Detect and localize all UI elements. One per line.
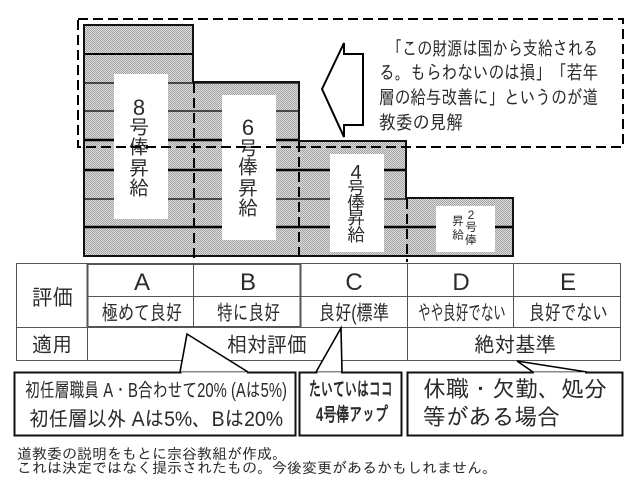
label: 8号俸昇給: 昇 [129, 158, 149, 180]
label: 2号俸昇給: 給 [452, 228, 464, 242]
text block: Hokkaido board view: 層の給与改善に」というのが道 [379, 87, 598, 109]
table row: 評価: 良好(標準 [319, 302, 389, 325]
staircase chart: salary step blocks [84, 25, 513, 262]
label: 2号俸昇給: 俸 [465, 233, 477, 247]
label: 2号俸昇給 [436, 206, 495, 252]
label: 6号俸昇給: 俸 [238, 157, 258, 179]
table row: 評価: 評価 [32, 285, 73, 310]
label: 6号俸昇給: 昇 [238, 178, 258, 200]
table row: 評価 [32, 269, 608, 325]
arrow pointing left [322, 43, 363, 137]
label: 2号俸昇給: 号 [465, 220, 477, 234]
label: 6号俸昇給: 号 [238, 138, 258, 160]
table row: 評価: 良好でない [529, 302, 608, 325]
callout: most teachers here: 4号俸アップ [316, 404, 388, 426]
table row: 評価: D [452, 269, 470, 296]
table row: 評価: C [345, 269, 363, 296]
callout: absolute criteria cases: 休職・欠勤、処分 [423, 376, 607, 402]
label: 2号俸昇給: 昇 [452, 214, 464, 228]
table row: 評価: 特に良好 [217, 302, 280, 325]
footer note: これは決定ではなく提示されたもの。今後変更があるかもしれません。 [17, 460, 497, 477]
callout: most teachers here: たいていはココ [309, 379, 393, 401]
label: 4号俸昇給: 給 [347, 225, 365, 245]
table row: 評価: A [134, 269, 150, 296]
footer note: 道教委の説明をもとに宗谷教組が作成。 [17, 446, 287, 463]
callout: A and B ratios [14, 334, 296, 436]
text block: Hokkaido board view: 教委の見解 [379, 113, 463, 134]
text block: Hokkaido board view [379, 39, 598, 134]
label: 4号俸昇給: 号 [347, 178, 365, 198]
callout: absolute criteria cases: 等がある場合 [423, 404, 560, 430]
table row: 評価: B [240, 269, 256, 296]
label: 8号俸昇給: 号 [129, 117, 149, 139]
table row: 適用: 適用 [32, 334, 72, 357]
label: 2号俸昇給: 2 [468, 208, 475, 222]
label: 8号俸昇給: 俸 [129, 137, 149, 159]
dashed callout frame [78, 19, 623, 147]
table row: 適用: 相対評価 [227, 334, 307, 357]
callout: A and B ratios: 初任層以外 Aは5%、Bは20% [29, 408, 283, 431]
label: 4号俸昇給: 俸 [347, 193, 365, 213]
label: 4号俸昇給: 4 [350, 162, 362, 184]
footer note [17, 446, 497, 477]
label: 8号俸昇給: 給 [129, 178, 149, 200]
table row: 評価: やや良好でない [418, 302, 506, 325]
table row: 適用: 絶対基準 [474, 334, 556, 357]
label: 4号俸昇給: 昇 [347, 208, 365, 228]
callout: absolute criteria cases [408, 361, 622, 436]
table row: 評価: 極めて良好 [102, 302, 182, 325]
label: 6号俸昇給: 6 [242, 115, 254, 140]
label: 8号俸昇給 [114, 74, 168, 219]
evaluation table [16, 263, 620, 360]
label: 6号俸昇給 [222, 95, 276, 240]
callout: most teachers here [300, 328, 402, 436]
table row: 適用 [32, 334, 556, 357]
label: 8号俸昇給: 8 [133, 95, 145, 120]
table row: 評価: E [560, 269, 576, 296]
callout: A and B ratios: 初任層職員 A・B合わせて20% (Aは5%) [25, 380, 287, 402]
label: 4号俸昇給 [330, 154, 384, 252]
text block: Hokkaido board view: る。もらわないのは損」「若年 [379, 62, 598, 84]
label: 6号俸昇給: 給 [238, 198, 258, 220]
